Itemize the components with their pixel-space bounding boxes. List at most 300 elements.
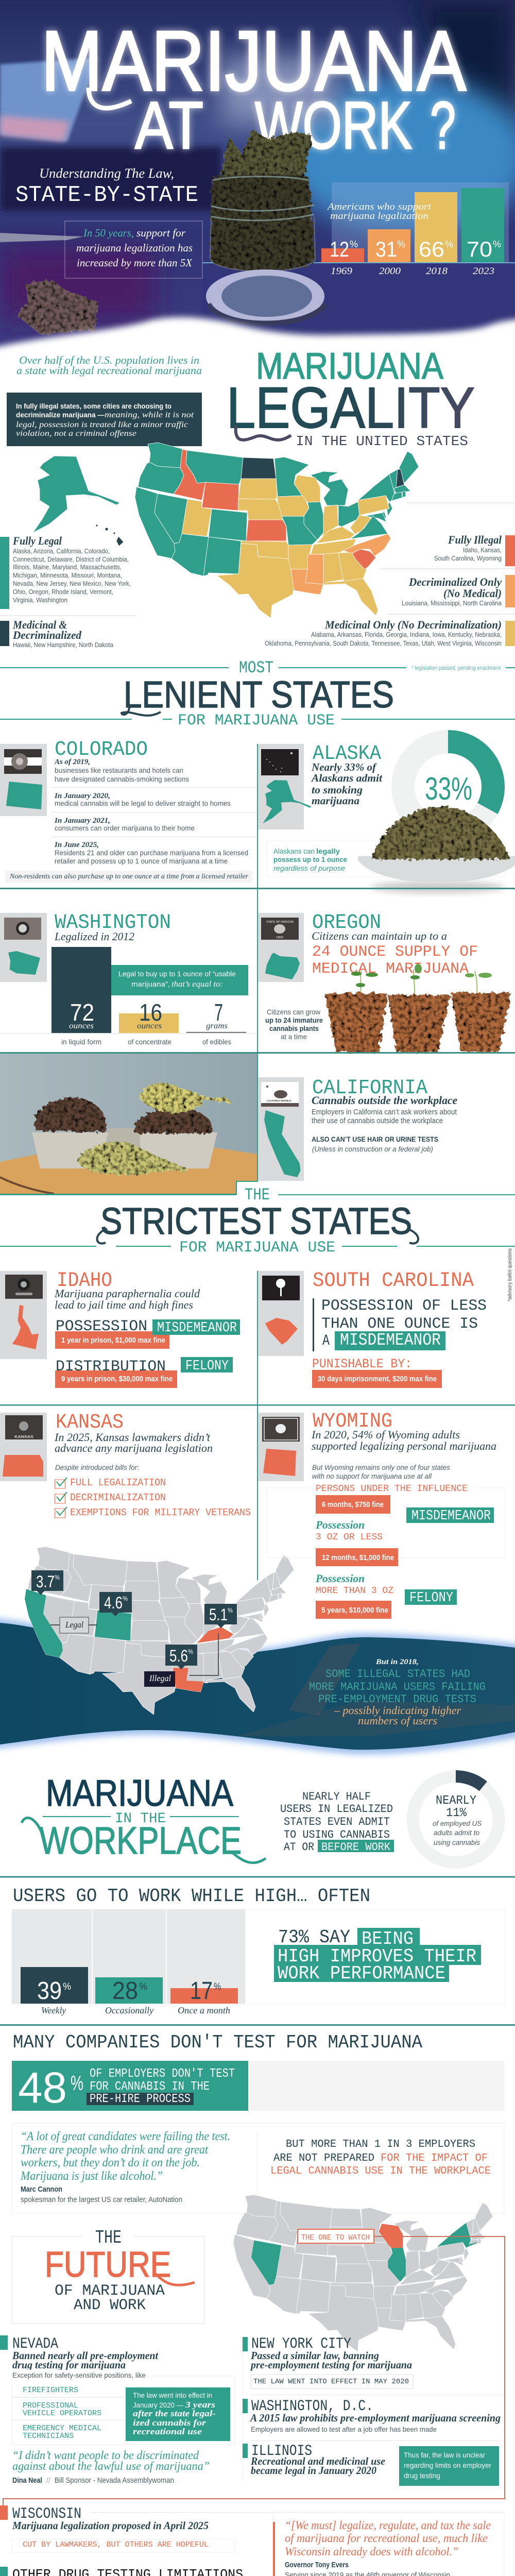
chart: support for legalization: 12 (330, 237, 349, 261)
text: but in 2018: MORE MARIJUANA USERS FAILING (309, 1681, 486, 1693)
icon: south carolina flag (262, 1276, 300, 1300)
panel: oregon: up to 24 immature (265, 1016, 323, 1024)
panel: california: Cannabis outside the workplace (312, 1094, 457, 1107)
legend: medicinal and decriminalized: Decriminalized (12, 629, 82, 641)
photo: cupcakes with buds (0, 1054, 257, 1194)
panel: wyoming: WYOMING (313, 1410, 392, 1433)
panel: california (258, 1077, 457, 1181)
icon: kansas flag: KANSAS (14, 1435, 33, 1439)
panel: alaska: marijuana (312, 794, 359, 807)
panel: oregon: Citizens can maintain up to a (312, 929, 447, 942)
text: over half (16, 354, 202, 377)
chart: support for legalization: 2018 (426, 266, 448, 277)
heading: the strictest states: STRICTEST STATES (100, 1201, 412, 1242)
text: nearly half: TO USING CANNABIS (284, 1828, 390, 1841)
panel: colorado (0, 738, 256, 883)
callout: 73 percent: 73% SAY (278, 1927, 350, 1948)
panel: colorado: In June 2025, (54, 841, 99, 849)
panel: nevada: TECHNICIANS (23, 2432, 74, 2441)
quote: marc cannon: Marc Cannon (21, 2185, 62, 2194)
label: the one to watch: THE ONE TO WATCH (301, 2233, 370, 2242)
chart: 11 percent donut: adults admit to (434, 1828, 479, 1837)
panel: south carolina: SOUTH CAROLINA (313, 1269, 474, 1293)
legend: medicinal and decriminalized: Hawaii, New Hampshire, North Dakota (13, 641, 114, 649)
panel: idaho: Marijuana paraphernalia could (54, 1287, 200, 1300)
callout: decriminalize (7, 393, 202, 446)
callout: 73 percent: HIGH IMPROVES THEIR (278, 1946, 476, 1967)
heading: marijuana legality: IN THE UNITED STATES (296, 434, 468, 450)
chart: frequency bars: Once a month (178, 2005, 230, 2015)
panel: nevada: EMERGENCY MEDICAL (23, 2424, 101, 2433)
panel: washington (0, 911, 256, 1046)
panel: alaska: Alaskans admit (311, 772, 383, 784)
subtitle: Understanding The Law, (39, 166, 174, 181)
panel: alaska: to smoking (312, 784, 363, 796)
heading: the strictest states: FOR MARIJUANA USE (179, 1239, 335, 1257)
heading: the future: THE (95, 2227, 122, 2248)
panel: south carolina: PUNISHABLE BY: (312, 1357, 412, 1371)
panel: california: Employers in California can’t ask workers about (312, 1108, 457, 1116)
text: employers not prepared: FOR THE IMPACT OF (381, 2153, 488, 2164)
panel: new york city (243, 2335, 413, 2388)
callout: 50 years: marijuana legalization has (76, 242, 193, 254)
icon: bowl of marijuana (358, 806, 515, 893)
map: legality by state (33, 443, 419, 618)
checklist (55, 1477, 251, 1518)
panel: washington: Legalized in 2012 (54, 930, 134, 943)
panel: colorado: businesses like restaurants and hotels can (55, 766, 183, 774)
text: but in 2018: SOME ILLEGAL STATES HAD (325, 1668, 470, 1681)
panel: kansas: advance any marijuana legislation (55, 1442, 213, 1454)
panel: idaho: MISDEMEANOR (157, 1320, 237, 1336)
panel: 48 percent of employers: 48 (18, 2063, 67, 2112)
panel: illinois: ILLINOIS (251, 2443, 312, 2460)
chart: support for legalization: % (493, 239, 501, 249)
panel: 48 percent of employers (12, 2061, 504, 2112)
chart: 11 percent donut: 11% (446, 1806, 467, 1820)
text: nearly half (280, 1790, 394, 1854)
panel: wisconsin (0, 2505, 504, 2576)
chart: support for legalization: 70 (467, 237, 492, 261)
callout: 3.7 percent: % (55, 1573, 60, 1581)
legend: decriminalized only: Louisiana, Mississippi, North Carolina (402, 599, 502, 607)
legend: medicinal and decriminalized (0, 618, 114, 649)
legend: decriminalized only: Decriminalized Only (408, 575, 502, 588)
text: employers not prepared: ARE NOT PREPARED (273, 2153, 374, 2164)
panel: california: (Unless in construction or a federal job) (312, 1145, 433, 1153)
panel: alaska: ALASKA (313, 742, 381, 766)
panel: wyoming: with no support for marijuana use at all (312, 1472, 432, 1480)
chart: usable marijuana equivalents: of edibles (202, 1038, 231, 1046)
text: employers not prepared: LEGAL CANNABIS USE IN THE WORKPLACE (270, 2165, 491, 2177)
icon: idaho flag (5, 1275, 43, 1299)
panel: oregon: at a time (281, 1032, 307, 1041)
panel: new york city: THE LAW WENT INTO EFFECT IN MAY 2020 (253, 2378, 409, 2386)
chart: 11 percent donut: using cannabis (434, 1838, 480, 1846)
note: advisory ballot questions: *advisory ballot questions (507, 1248, 513, 1301)
panel: alaska (258, 742, 515, 893)
text: over half: Over half of the U.S. population lives in (19, 354, 199, 366)
chart: support for legalization: 1969 (331, 266, 353, 277)
panel: colorado: retailer and possess up to 1 ounce of marijuana at a time (55, 857, 228, 865)
legend: fully legal: Michigan, Minnesota, Missouri, Montana, (13, 571, 122, 579)
panel: colorado: consumers can order marijuana to their home (55, 824, 195, 832)
chart: support for legalization (202, 182, 515, 277)
panel: nevada: ized cannabis for (133, 2418, 206, 2428)
legend: fully legal: Virginia, Washington (13, 596, 67, 604)
chart: 11 percent donut: of employed US (433, 1819, 482, 1827)
heading: marijuana in the workplace (22, 1773, 266, 1863)
callout: 3.7 percent: 3.7 (36, 1572, 55, 1591)
text: but in 2018 (309, 1658, 486, 1727)
callout: decriminalize: violation, not a criminal offense (16, 429, 136, 438)
panel: alaska: possess up to 1 ounce (273, 855, 347, 863)
text: but in 2018: But in 2018, (375, 1658, 419, 1666)
panel: washington dc: A 2015 law prohibits pre-employment marijuana screening (249, 2412, 501, 2424)
chart: usable marijuana equivalents: 7 (214, 999, 223, 1026)
panel: kansas: KANSAS (56, 1411, 124, 1434)
panel: nevada (0, 2335, 235, 2485)
panel: wyoming: But Wyoming remains only one of four states (312, 1463, 450, 1471)
icon: loose bud (15, 280, 98, 335)
heading: marijuana in the workplace: WORKPLACE (39, 1819, 242, 1862)
chart: support for legalization: marijuana legalization (330, 211, 428, 222)
panel: colorado: COLORADO (55, 738, 148, 761)
chart: frequency bars: % (63, 1981, 71, 1992)
chart: 33 percent donut (403, 742, 493, 832)
panel: wyoming: FELONY (409, 1590, 453, 1606)
panel: illinois: became legal in January 2020 (251, 2464, 376, 2477)
icon: alaska flag (261, 749, 299, 775)
checklist: DECRIMINALIZATION (70, 1492, 166, 1503)
panel: 48 percent of employers: FOR CANNABIS IN THE (90, 2080, 210, 2094)
panel: wyoming: 6 months, $750 fine (322, 1501, 384, 1509)
panel: south carolina: POSSESSION OF LESS (321, 1297, 487, 1315)
label: the one to watch (298, 2229, 374, 2243)
panel: nevada: Exception for safety-sensitive positions, like (12, 2371, 146, 2379)
panel: south carolina: MISDEMEANOR (340, 1331, 441, 1350)
panel: oregon: Citizens can grow (267, 1008, 321, 1016)
quote: governor evers: Wisconsin already does with alcohol.” (285, 2545, 458, 2558)
panel: california: their use of cannabis outside the workplace (312, 1117, 443, 1125)
panel: nevada: drug testing for marijuana (12, 2359, 126, 2371)
panel: idaho: POSSESSION (56, 1318, 147, 1335)
panel: kansas: In 2025, Kansas lawmakers didn’t (54, 1431, 211, 1444)
panel: wyoming: Possession (315, 1518, 365, 1531)
callout: 5.6 percent (165, 1645, 197, 1669)
panel: wyoming (258, 1410, 505, 1619)
chart: support for legalization: 31 (375, 237, 397, 261)
panel: hero (0, 0, 515, 371)
legend: fully illegal: South Carolina, Wyoming (434, 554, 502, 562)
heading: the strictest states: THE (245, 1185, 270, 1205)
panel: wyoming: PERSONS UNDER THE INFLUENCE (316, 1484, 468, 1494)
callout: 3.7 percent (31, 1570, 63, 1595)
heading: the future (12, 2227, 204, 2324)
chart: frequency bars: Weekly (41, 2005, 66, 2015)
callout: 73 percent: BEING (362, 1928, 414, 1950)
title (41, 13, 466, 163)
title: AT (135, 88, 203, 163)
panel: washington: WASHINGTON (55, 911, 171, 935)
legend: fully illegal: Idaho, Kansas, (463, 546, 502, 554)
quote: marc cannon (20, 2130, 230, 2204)
panel: illinois: regarding limits on employer (404, 2461, 491, 2469)
panel: wyoming: MISDEMEANOR (411, 1509, 491, 1524)
label: illegal: Illegal (149, 1673, 171, 1683)
panel: oregon: OREGON (312, 911, 381, 935)
quote: governor evers (273, 2512, 504, 2576)
subtitle (15, 166, 198, 208)
panel: illinois: Thus far, the law is unclear (404, 2451, 485, 2459)
panel: dark wave background (0, 1618, 515, 1754)
chart: frequency bars: 39 (37, 1977, 62, 2005)
panel: south carolina: A (322, 1332, 330, 1350)
heading: the future: AND WORK (74, 2297, 146, 2314)
panel: wyoming: 3 OZ OR LESS (316, 1532, 383, 1543)
icon: oregon flag: STATE OF OREGON (266, 921, 294, 924)
legend: medicinal only: Medicinal Only (No Decriminalization) (324, 618, 502, 631)
icon: california flag (261, 1082, 299, 1107)
panel: quote and employers unprepared (12, 2123, 504, 2213)
text: nearly half: STATES EVEN ADMIT (284, 1816, 390, 1828)
panel: washington dc (243, 2398, 501, 2433)
panel: wisconsin: CUT BY LAWMAKERS, BUT OTHERS ARE HOPEFUL (23, 2540, 209, 2549)
chart: usable marijuana equivalents: 16 (139, 999, 162, 1026)
legend: fully legal: Nevada, New Jersey, New Mexico, New York, (13, 580, 131, 587)
chart: 11 percent donut: NEARLY (436, 1794, 476, 1808)
panel: idaho: DISTRIBUTION (56, 1358, 166, 1376)
panel: washington dc: Employers are allowed to test after a job offer has been made (251, 2425, 437, 2433)
panel: 48 percent of employers: PRE-HIRE PROCESS (90, 2092, 191, 2106)
callout: 5.1 percent: 5.1 (209, 1605, 228, 1624)
text: but in 2018: numbers of users (358, 1714, 437, 1727)
panel: how often users work high (12, 1909, 505, 2015)
panel: nevada: The law went into effect in (133, 2391, 212, 2399)
quote: marc cannon: spokesman for the largest US car retailer, AutoNation (21, 2196, 182, 2204)
callout: 50 years: support for (136, 227, 186, 239)
heading: most lenient states: MOST (239, 658, 273, 677)
chart: frequency bars: % (139, 1981, 147, 1992)
panel: wyoming: supported legalizing personal marijuana (312, 1439, 496, 1452)
callout: 4.6 percent: % (123, 1595, 128, 1602)
chart: usable marijuana equivalents: ounces (69, 1022, 94, 1030)
panel: colorado: Residents 21 and older can purchase marijuana from a licensed (55, 849, 248, 857)
label: legal (50, 1617, 97, 1633)
panel: kansas (0, 1411, 251, 1518)
panel: nevada: Dina Neal (12, 2477, 42, 2485)
panel: wisconsin: Marijuana legalization proposed in April 2025 (12, 2519, 209, 2532)
panel: wisconsin: WISCONSIN (12, 2505, 81, 2523)
chart: usable marijuana equivalents: 72 (70, 999, 94, 1026)
icon: glass ashtray (206, 269, 325, 324)
legend: decriminalized only (402, 575, 515, 607)
chart: 33 percent donut: 33% (425, 771, 472, 807)
legend: medicinal only (265, 618, 515, 647)
legend: fully legal: Ohio, Oregon, Rhode Island, Vermont, (13, 588, 113, 596)
icon: california flag: CALIFORNIA REPUBLIC (267, 1099, 292, 1102)
heading: most lenient states: FOR MARIJUANA USE (178, 712, 335, 730)
callout: 5.6 percent: % (188, 1648, 193, 1655)
text: nearly half: AT OR (284, 1841, 314, 1854)
map: future of marijuana and work (3, 2195, 505, 2506)
heading: the future: FUTURE (45, 2244, 171, 2284)
icon: oregon flag: 1859 (276, 936, 283, 939)
panel: south carolina (258, 1269, 487, 1388)
panel: illinois: Recreational and medicinal use (250, 2455, 385, 2467)
chart: frequency bars: % (214, 1981, 221, 1992)
panel: alaska: regardless of purpose (273, 864, 345, 872)
legend: decriminalized only: (No Medical) (443, 587, 502, 600)
panel: nevada: FIREFIGHTERS (23, 2386, 78, 2395)
icon: oregon flag (261, 918, 299, 940)
icon: jar of buds (210, 129, 315, 271)
panel: nevada: // (46, 2477, 51, 2485)
heading: marijuana legality (227, 346, 475, 450)
callout: 5.1 percent: % (228, 1606, 233, 1614)
quote: governor evers: “[We must] legalize, regulate, and tax the sale (285, 2519, 491, 2532)
heading: many companies: MANY COMPANIES DON'T TEST FOR MARIJUANA (13, 2032, 422, 2053)
panel: new york city: NEW YORK CITY (251, 2335, 351, 2353)
callout: decriminalize: legal, possession is treated like a minor traffic (16, 420, 188, 429)
panel: colorado: have designated cannabis-smoking sections (55, 775, 189, 783)
quote: marc cannon: There are people who drink and are great (21, 2143, 209, 2157)
chart: support for legalization: 2023 (473, 266, 494, 277)
text: but in 2018: PRE-EMPLOYMENT DRUG TESTS (318, 1693, 476, 1706)
chart: frequency bars: 17 (190, 1977, 213, 2005)
panel: nevada: “I didn’t want people to be discriminated (12, 2449, 199, 2462)
heading: most lenient states: * legislation passed, pending enactment (411, 665, 501, 671)
panel: idaho: 9 years in prison, $30,000 max fine (61, 1375, 173, 1383)
chart: frequency bars: 28 (112, 1977, 138, 2005)
text: nearly half: NEARLY HALF (302, 1790, 371, 1803)
text: nearly half: BEFORE WORK (321, 1841, 391, 1854)
panel: colorado: Non-residents can also purchase up to one ounce at a time from a licensed retailer (9, 873, 249, 880)
panel: colorado: In January 2020, (54, 792, 110, 800)
quote: governor evers: of marijuana for recreational use, much like (285, 2532, 488, 2545)
panel: wyoming: 5 years, $10,000 fine (321, 1606, 388, 1615)
callout: 5.1 percent (204, 1604, 237, 1628)
icon: wyoming flag (262, 1417, 300, 1442)
icon: kansas flag (5, 1415, 43, 1439)
panel: colorado: As of 2019, (54, 758, 90, 766)
legend: fully illegal (434, 533, 515, 566)
panel: oregon: cannabis plants (269, 1024, 319, 1032)
title: ? (430, 88, 456, 163)
callout: 73 percent (274, 1927, 481, 1984)
chart: support for legalization: % (445, 239, 453, 249)
heading: most lenient states: LENIENT STATES (124, 674, 394, 716)
heading: marijuana legality: MARIJUANA (256, 346, 443, 387)
panel: nevada: Bill Sponsor - Nevada Assemblywoman (55, 2477, 174, 2485)
label: legal: Legal (65, 1620, 83, 1630)
panel: kansas: Despite introduced bills for: (55, 1463, 139, 1471)
label: illegal (144, 1633, 218, 1687)
chart: frequency bars: Occasionally (105, 2005, 153, 2015)
panel: california: CALIFORNIA (312, 1077, 427, 1100)
map: failed drug test rates (25, 1547, 294, 1715)
chart: support for legalization: 2000 (379, 266, 401, 277)
checklist: FULL LEGALIZATION (70, 1477, 166, 1488)
quote: marc cannon: workers, but they don’t do it on the job. (21, 2156, 200, 2170)
text: employers not prepared (270, 2139, 491, 2177)
panel: nevada: Banned nearly all pre-employment (12, 2349, 159, 2362)
text: nearly half: USERS IN LEGALIZED (280, 1803, 393, 1816)
panel: nevada: VEHICLE OPERATORS (23, 2409, 101, 2418)
chart: support for legalization: 66 (419, 237, 444, 261)
panel: idaho: FELONY (185, 1359, 229, 1374)
legend: fully legal: Fully Legal (12, 534, 62, 547)
checklist: EXEMPTIONS FOR MILITARY VETERANS (70, 1507, 251, 1518)
panel: oregon: MEDICAL MARIJUANA (312, 960, 469, 978)
panel: nevada: 3 years (185, 2400, 215, 2410)
chart: frequency bars (12, 1909, 245, 2015)
callout: decriminalize: meaning, while it is not (105, 411, 194, 419)
panel: idaho: 1 year in prison, $1,000 max fine (61, 1336, 165, 1345)
quote: governor evers: Governor Tony Evers (285, 2561, 349, 2569)
icon: seedlings in peat pots (325, 964, 511, 1053)
panel: nevada: PROFESSIONAL (23, 2401, 78, 2410)
callout: 50 years: increased by more than 5X (77, 257, 193, 269)
icon: washington flag (4, 918, 41, 940)
panel: illinois (243, 2443, 499, 2486)
text: but in 2018: – possibly indicating higher (334, 1704, 461, 1717)
panel: 48 percent of employers: % (71, 2072, 83, 2095)
text: employers not prepared: BUT MORE THAN 1 IN 3 EMPLOYERS (286, 2139, 475, 2150)
panel: alaska: legally (316, 847, 340, 855)
panel: nevada: NEVADA (12, 2335, 58, 2353)
panel: 48 percent of employers: OF EMPLOYERS DON'T TEST (90, 2067, 235, 2081)
legend: fully legal: Connecticut, Delaware, District of Columbia, (13, 555, 129, 563)
panel: new york city: pre-employment testing for marijuana (250, 2359, 412, 2371)
panel: colorado: medical cannabis will be legal to deliver straight to homes (55, 799, 231, 807)
panel: nevada: after the state legal- (133, 2409, 216, 2418)
title: WORK (255, 88, 412, 163)
chart: usable marijuana equivalents: in liquid form (61, 1038, 101, 1046)
heading: the strictest states (0, 1185, 515, 1257)
panel: new york city: Passed a similar law, banning (250, 2349, 379, 2362)
chart: 11 percent donut (413, 1776, 499, 1862)
legend: fully legal: Illinois, Maine, Maryland, Massachusetts, (13, 563, 122, 571)
panel: alaska: Alaskans can (273, 847, 315, 855)
chart: support for legalization: % (350, 239, 358, 249)
panel: nevada: against about the lawful use of marijuana” (12, 2460, 210, 2472)
heading: marijuana in the workplace: IN THE (115, 1811, 166, 1827)
chart: usable marijuana equivalents: that’s equal to: (171, 980, 223, 989)
chart: support for legalization: Americans who support (327, 201, 432, 212)
callout: 50 years (65, 221, 202, 278)
chart: usable marijuana equivalents: marijuana”, (131, 980, 170, 988)
heading: marijuana in the workplace: MARIJUANA (46, 1773, 233, 1814)
panel: california: ALSO CAN’T USE HAIR OR URINE TESTS (312, 1135, 438, 1143)
panel: oregon (258, 911, 511, 1053)
panel: idaho: lead to jail time and high fines (55, 1298, 193, 1311)
panel: idaho (0, 1269, 240, 1388)
callout: 4.6 percent (99, 1592, 132, 1616)
panel: illinois: drug testing (404, 2471, 440, 2480)
callout: 4.6 percent: 4.6 (104, 1594, 123, 1612)
panel: wyoming: MORE THAN 3 OZ (316, 1586, 393, 1596)
callout: 50 years: In 50 years, (83, 227, 134, 239)
panel: oregon: 24 OUNCE SUPPLY OF (312, 943, 478, 961)
chart: usable marijuana equivalents: ounces (137, 1022, 162, 1030)
panel: wyoming: In 2020, 54% of Wyoming adults (311, 1428, 460, 1441)
callout: decriminalize: In fully illegal states, some cities are choosing to (16, 402, 171, 410)
quote: marc cannon: “A lot of great candidates were failing the test. (21, 2130, 230, 2143)
chart: usable marijuana equivalents: of concentrate (128, 1038, 171, 1046)
panel: nevada: recreational use (133, 2427, 202, 2436)
chart: usable marijuana equivalents: grams (206, 1022, 228, 1030)
